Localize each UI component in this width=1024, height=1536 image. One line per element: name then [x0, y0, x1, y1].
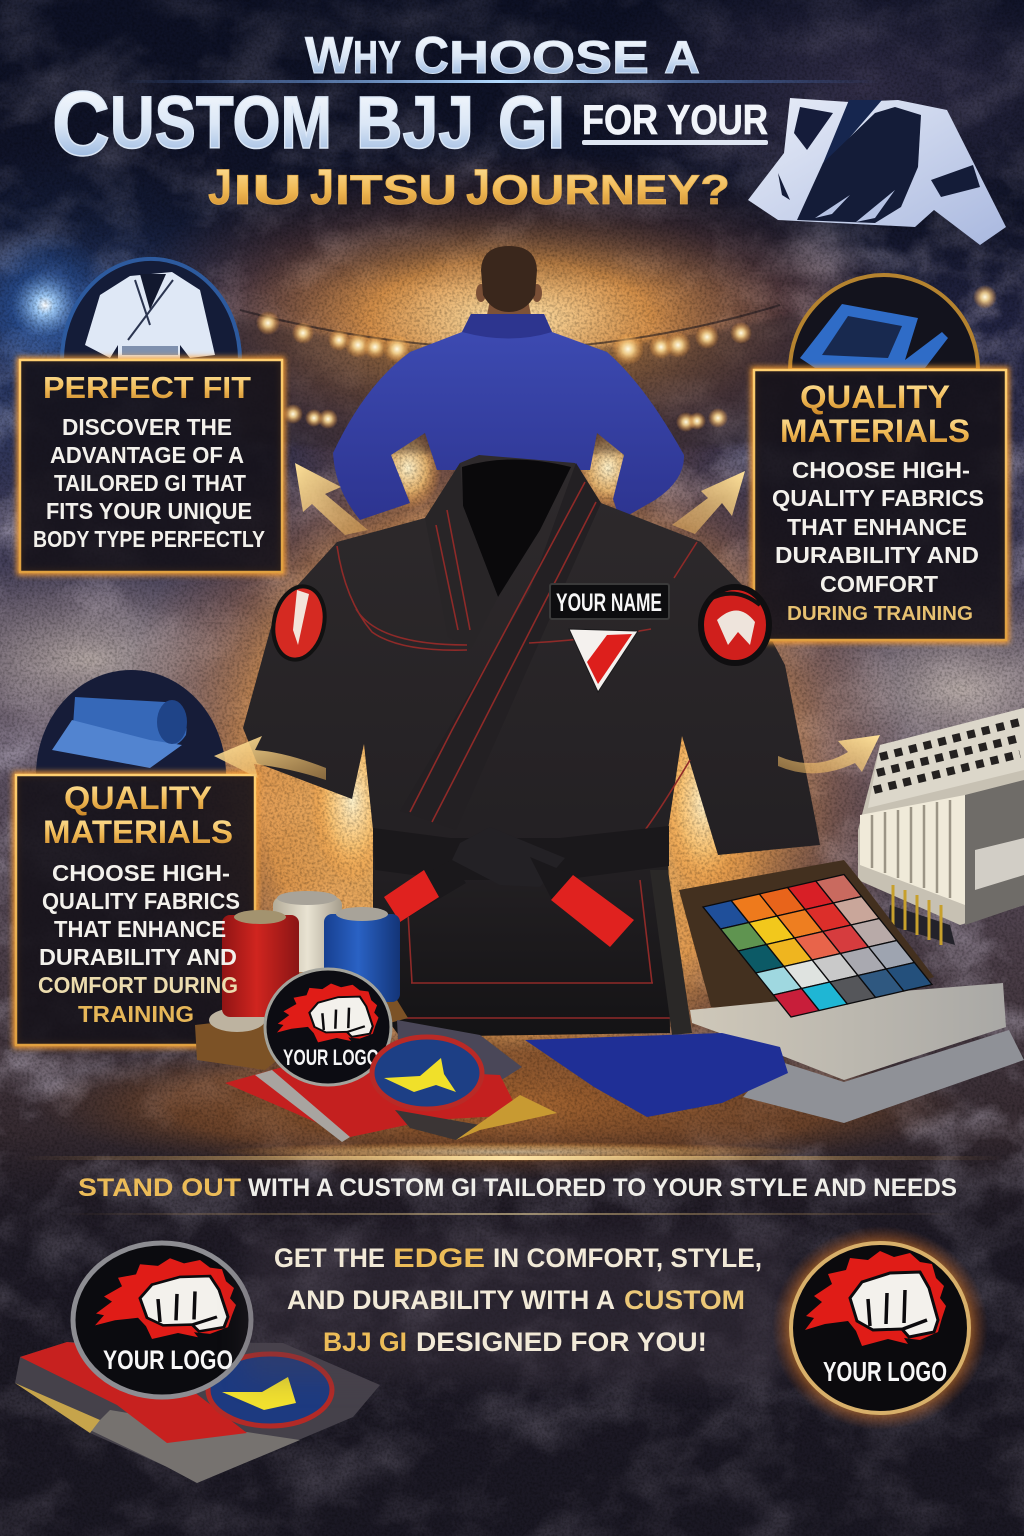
- title: [52, 27, 880, 215]
- patch: yellow bird: [372, 1037, 482, 1109]
- blue gi back: [333, 314, 684, 520]
- arrow: to embroidery: [778, 735, 880, 773]
- message line two: AND DURABILITY WITH A: [287, 1285, 615, 1315]
- black gi jacket: [243, 455, 820, 1037]
- heading: QUALITY: [800, 379, 950, 415]
- heading: [43, 780, 233, 850]
- neck opening: [462, 460, 571, 597]
- blue folded fabric: [525, 1033, 788, 1117]
- message line three: DESIGNED FOR YOU!: [416, 1327, 707, 1357]
- patch: your logo bottom right: YOUR LOGO: [823, 1356, 947, 1387]
- title line: jiu jitsu journey: IU: [233, 166, 302, 213]
- thread spools: [195, 891, 408, 1070]
- body text: FITS YOUR UNIQUE: [46, 498, 252, 524]
- arrow: to perfect fit: [295, 463, 368, 535]
- name patch: YOUR NAME: [556, 589, 662, 617]
- body text: COMFORT: [820, 571, 938, 597]
- panel: perfect fit: [20, 259, 282, 572]
- message line one: EDGE: [393, 1243, 485, 1273]
- tagline text: STAND OUT: [78, 1174, 241, 1202]
- lapel right: [400, 463, 601, 830]
- panel body text: quality materials left: TRAINING: [78, 1001, 194, 1027]
- title line: jiu jitsu journey: OURNEY?: [491, 166, 730, 213]
- body text: TAILORED GI THAT: [54, 470, 246, 496]
- title line: jiu jitsu journey: ITSU: [335, 166, 457, 213]
- fabric stack: [15, 1342, 380, 1483]
- left sleeve patch: [267, 582, 331, 664]
- body text: CHOOSE HIGH-: [792, 457, 970, 483]
- stadium lights: [235, 285, 997, 455]
- man in blue gi: [333, 246, 684, 520]
- collar: [462, 314, 552, 338]
- patch: your logo bottom right: [772, 1226, 988, 1430]
- title line: why choose a: HOOSE: [449, 31, 649, 83]
- body text: [772, 457, 984, 625]
- panel body text: quality materials left: [38, 860, 240, 1027]
- arrow: to lower materials: [214, 736, 326, 780]
- blue badge: [208, 1354, 332, 1426]
- icon: white gi: [62, 259, 240, 362]
- body text: DURABILITY AND: [775, 542, 979, 568]
- belt: [373, 826, 669, 880]
- colour swatch card: [703, 874, 932, 1017]
- title line: custom bjj gi: BJJ: [356, 81, 474, 164]
- message line one: IN COMFORT, STYLE,: [493, 1243, 762, 1273]
- grey folded fabric: [743, 1030, 1024, 1123]
- panel body text: quality materials left: THAT ENHANCE: [54, 916, 226, 942]
- panel body text: quality materials left: DURABILITY AND: [39, 944, 237, 970]
- colour swatches and cream fabric: [525, 860, 1024, 1123]
- round badge: [73, 1243, 251, 1397]
- embroidery machine: [858, 708, 1024, 945]
- message line three: BJJ GI: [323, 1327, 407, 1357]
- panel: quality materials right: [754, 275, 1006, 640]
- right sleeve patch: [701, 587, 769, 663]
- red stitching: [337, 482, 697, 1018]
- icon: fabric sheets: [790, 275, 978, 370]
- triangle patch: [569, 629, 638, 692]
- body text: [33, 414, 265, 552]
- heading: QUALITY: [64, 780, 212, 816]
- body text: DISCOVER THE: [62, 414, 232, 440]
- heading: PERFECT FIT: [43, 370, 251, 405]
- divider band and tagline: [20, 1156, 1004, 1215]
- body text: DURING TRAINING: [787, 603, 973, 625]
- brown leather base: [679, 860, 934, 1020]
- head: [476, 246, 542, 320]
- tagline text: WITH A CUSTOM GI TAILORED TO YOUR STYLE AND NEEDS: [248, 1174, 957, 1202]
- message line one: GET THE: [274, 1243, 385, 1273]
- title line: why choose a: HY: [353, 31, 401, 83]
- body text: BODY TYPE PERFECTLY: [33, 526, 265, 552]
- patch: your logo bottom left: YOUR LOGO: [103, 1345, 233, 1375]
- title line: jiu jitsu journey: J: [310, 159, 334, 215]
- patch: your logo small: YOUR LOGO: [283, 1045, 379, 1070]
- title line: why choose a: A: [664, 31, 700, 83]
- panel body text: quality materials left: COMFORT DURING: [38, 972, 238, 998]
- patch: your logo small: [265, 969, 391, 1085]
- gi patches: [267, 582, 769, 692]
- message line two: CUSTOM: [624, 1285, 745, 1315]
- closing message: [245, 1235, 790, 1380]
- title line: custom bjj gi: USTOM: [110, 81, 332, 164]
- arrow: to quality materials: [672, 471, 745, 534]
- belt tails: [384, 860, 466, 922]
- lapel left: [425, 463, 498, 649]
- heading: [780, 379, 970, 449]
- skirt right strip: [650, 870, 692, 1035]
- title line: custom bjj gi: GI: [498, 81, 565, 164]
- body text: QUALITY FABRICS: [772, 485, 984, 511]
- fabric swatches and patches under gi: [225, 969, 557, 1142]
- title line: for your: FOR: [582, 96, 658, 143]
- title line: jiu jitsu journey: J: [208, 159, 232, 215]
- title line: why choose a: W: [305, 27, 354, 85]
- patch: your logo bottom left: [15, 1243, 380, 1483]
- jacket body: [243, 455, 820, 1037]
- heading: MATERIALS: [780, 413, 970, 449]
- panel: quality materials left: [16, 670, 255, 1045]
- title line: for your: YOUR: [667, 96, 768, 143]
- icon: gi jacket outline: [748, 98, 1006, 245]
- icon: fabric roll: [36, 670, 226, 775]
- title line: custom bjj gi: C: [52, 73, 110, 175]
- title line: jiu jitsu journey: J: [466, 159, 490, 215]
- name patch: [550, 584, 669, 619]
- title line: why choose a: C: [414, 27, 449, 85]
- panel body text: quality materials left: CHOOSE HIGH-: [52, 860, 230, 886]
- body text: ADVANTAGE OF A: [50, 442, 244, 468]
- body text: THAT ENHANCE: [787, 514, 967, 540]
- panel body text: quality materials left: QUALITY FABRICS: [42, 888, 240, 914]
- heading: MATERIALS: [43, 814, 233, 850]
- cream folded fabric: [690, 983, 1006, 1080]
